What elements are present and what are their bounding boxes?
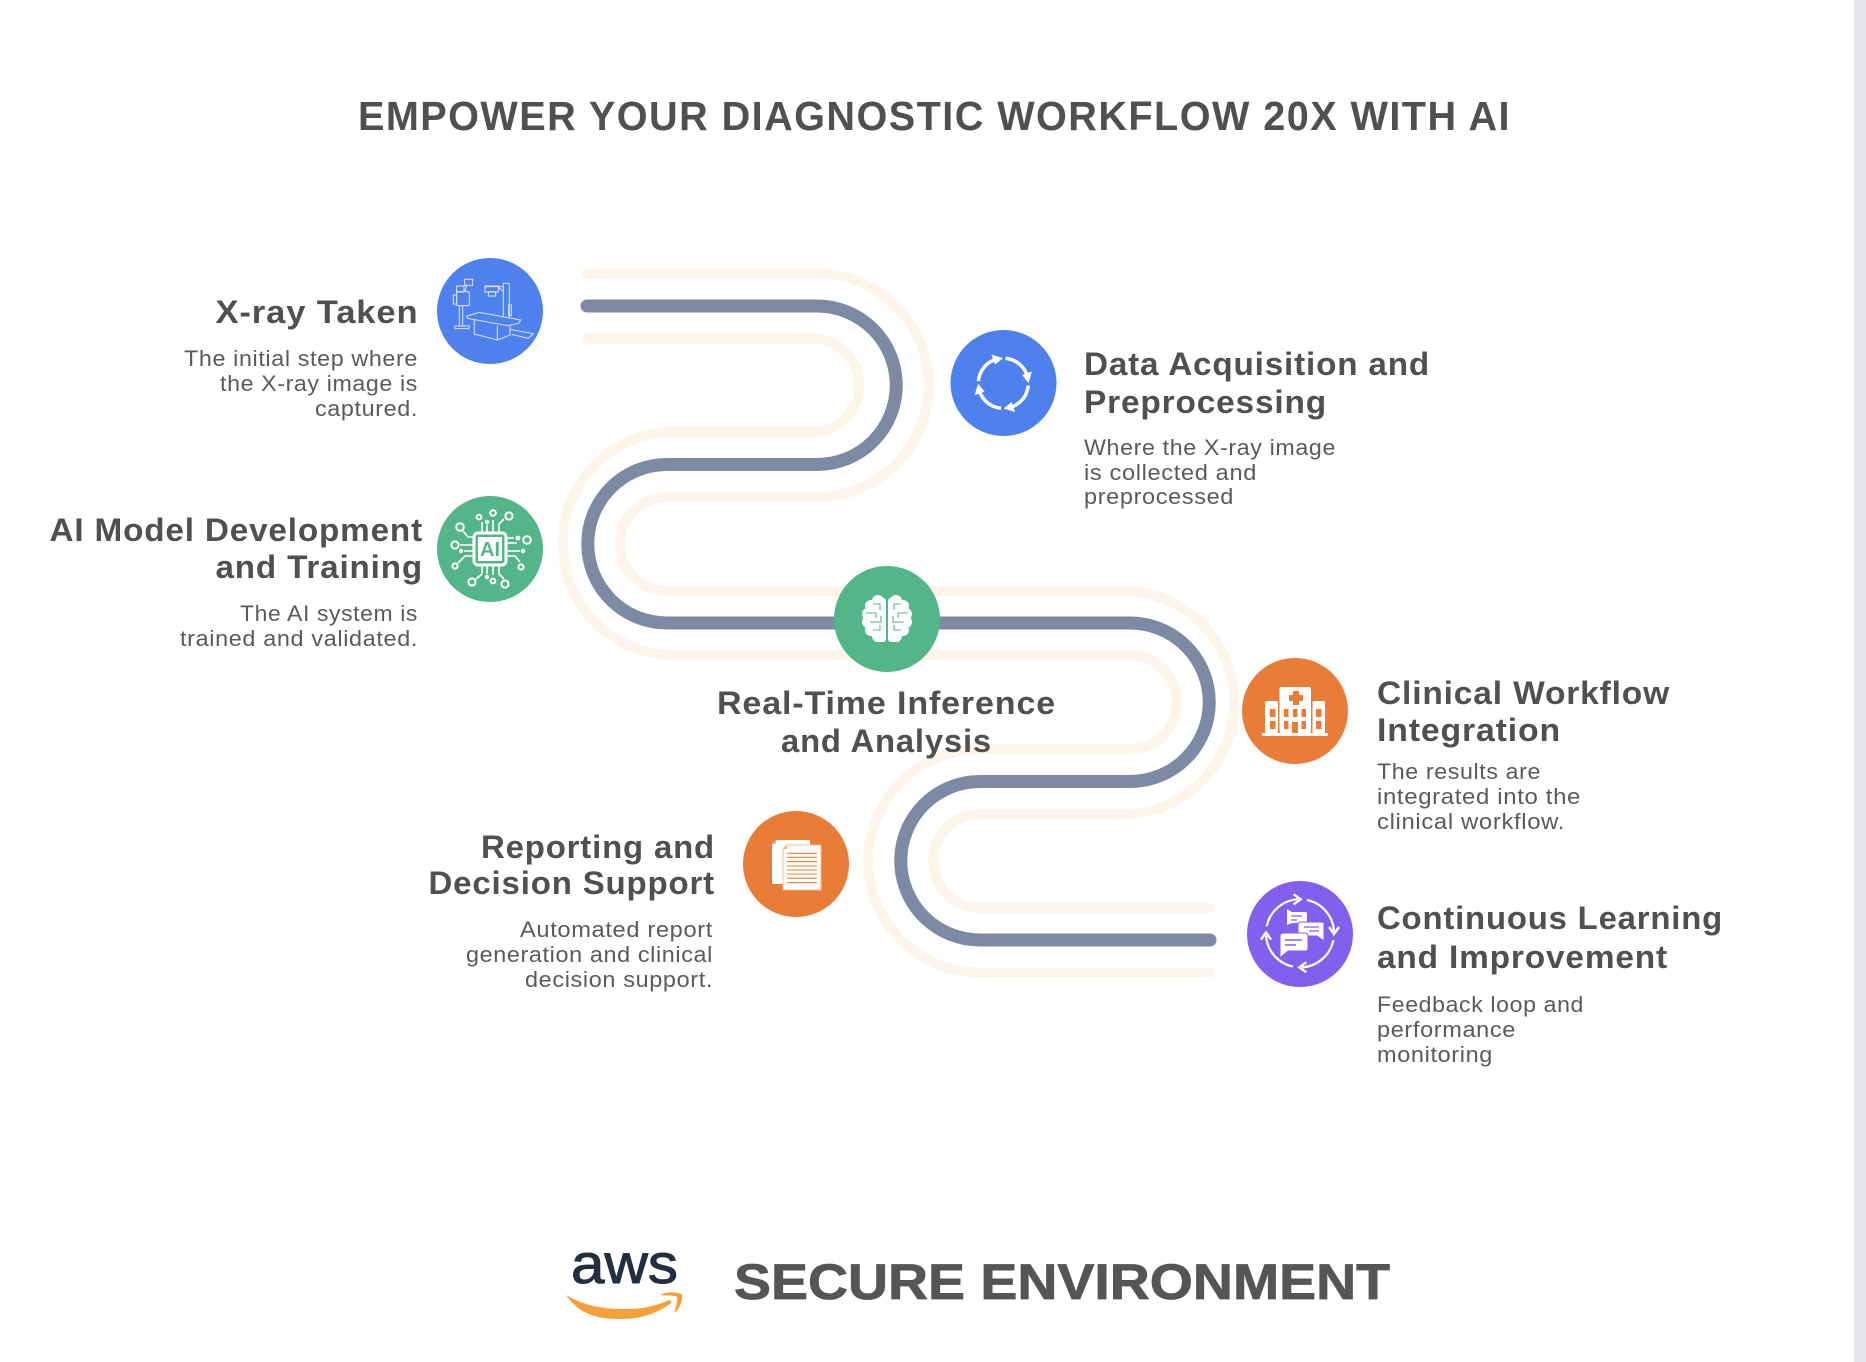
description: preprocessed <box>1084 484 1234 509</box>
heading <box>1377 900 1723 975</box>
description <box>1377 992 1584 1067</box>
icon: AWS logo: aws <box>571 1232 678 1295</box>
icon: cycle arrows <box>950 330 1056 436</box>
road inner edge: cream band <box>563 338 1210 973</box>
heading: Reporting and <box>481 829 715 865</box>
heading <box>50 512 423 585</box>
description: The AI system is <box>240 601 418 626</box>
description: is collected and <box>1084 460 1257 485</box>
heading: and Improvement <box>1377 939 1668 975</box>
icon: documents <box>743 811 849 917</box>
icon: AWS logo <box>566 1232 682 1319</box>
description: Automated report <box>520 917 713 942</box>
road outer edge: cream band <box>587 274 1234 908</box>
description <box>180 601 418 651</box>
heading <box>1084 346 1430 420</box>
footer: AWS secure environment <box>566 1232 1390 1319</box>
description: Where the X-ray image <box>1084 435 1336 460</box>
icon: hospital <box>1242 658 1348 764</box>
step: Data Acquisition and Preprocessing <box>950 330 1430 509</box>
heading <box>717 685 1056 759</box>
heading: AI Model Development <box>50 512 423 548</box>
icon: AI chip <box>437 496 543 602</box>
description: captured. <box>315 396 418 421</box>
step: X-ray Taken <box>184 258 543 421</box>
description <box>184 346 418 421</box>
description: decision support. <box>525 967 713 992</box>
heading: Decision Support <box>428 865 715 901</box>
description: The initial step where <box>184 346 418 371</box>
description: performance <box>1377 1017 1516 1042</box>
icon: feedback loop with chat bubbles <box>1247 881 1353 987</box>
description: trained and validated. <box>180 626 418 651</box>
heading: Continuous Learning <box>1377 900 1723 936</box>
heading: and Training <box>216 549 423 585</box>
road centre line: slate <box>587 306 1210 940</box>
heading: Real-Time Inference <box>717 685 1056 721</box>
description: generation and clinical <box>466 942 713 967</box>
step: Real-Time Inference and Analysis <box>717 566 1056 759</box>
step: Reporting and Decision Support <box>428 811 849 992</box>
description: monitoring <box>1377 1042 1493 1067</box>
heading: Integration <box>1377 712 1561 748</box>
title: EMPOWER YOUR DIAGNOSTIC WORKFLOW 20X WITH AI <box>358 93 1511 139</box>
icon: brain <box>834 566 940 672</box>
description: integrated into the <box>1377 784 1581 809</box>
icon: AI chip: AI <box>480 539 500 561</box>
description: clinical workflow. <box>1377 809 1565 834</box>
description <box>1084 435 1336 509</box>
step: AI Model Development and Training <box>50 496 543 651</box>
description <box>466 917 713 992</box>
description: the X-ray image is <box>220 371 418 396</box>
heading: Clinical Workflow <box>1377 675 1670 711</box>
description: The results are <box>1377 759 1541 784</box>
heading: Data Acquisition and <box>1084 346 1430 382</box>
heading <box>428 829 715 901</box>
step: Continuous Learning and Improvement <box>1247 881 1723 1067</box>
heading: Preprocessing <box>1084 384 1327 420</box>
heading: X-ray Taken <box>216 294 418 330</box>
description <box>1377 759 1581 834</box>
heading <box>1377 675 1670 748</box>
heading: and Analysis <box>781 723 992 759</box>
description: Feedback loop and <box>1377 992 1584 1017</box>
step: Clinical Workflow Integration <box>1242 658 1670 834</box>
winding road path connecting the steps <box>563 274 1234 973</box>
icon: x-ray machine <box>437 258 543 364</box>
footer label: SECURE ENVIRONMENT <box>734 1254 1390 1310</box>
